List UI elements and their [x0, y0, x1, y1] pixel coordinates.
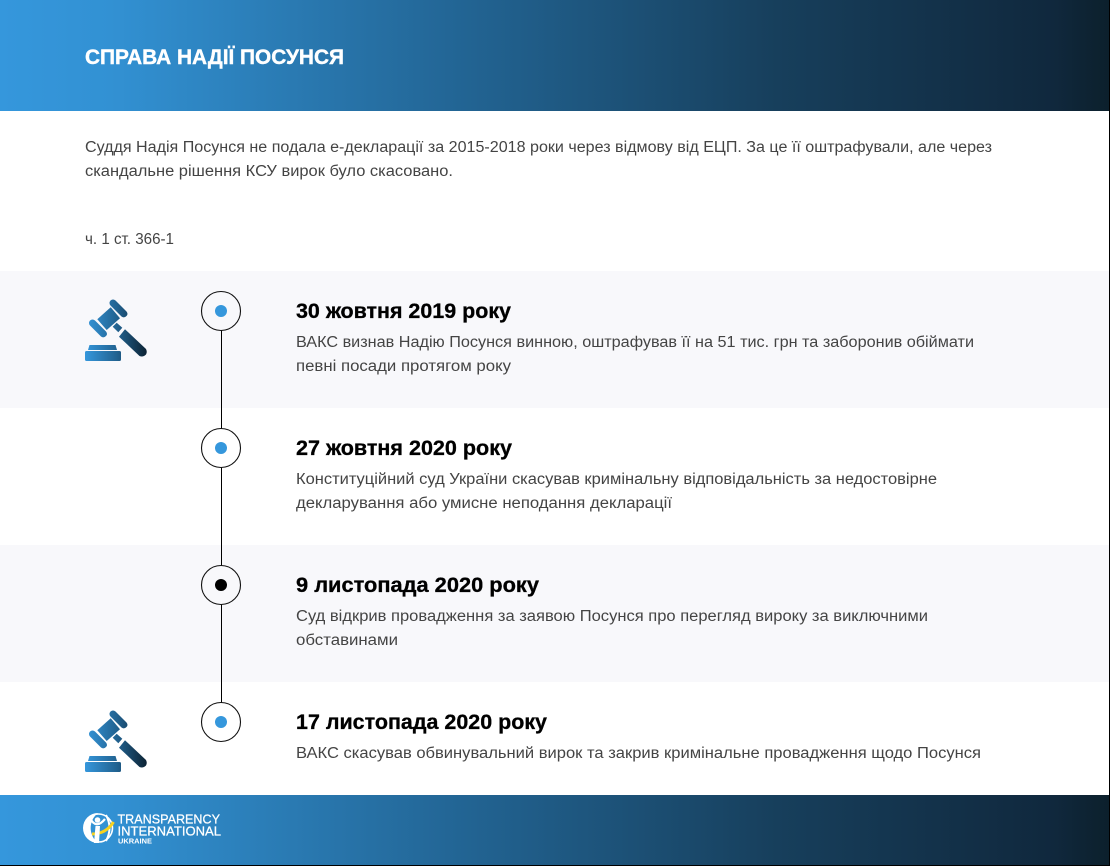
event 2: декларування або умисне неподання декларації	[296, 495, 673, 512]
band 1 background	[0, 271, 1109, 408]
timeline node 4	[202, 702, 240, 742]
event 3: 9 листопада 2020 року	[296, 574, 539, 597]
icon: gavel 1	[85, 300, 147, 361]
timeline node 1	[202, 292, 240, 330]
event 3: Суд відкрив провадження за заявою Посунся про перегляд вироку за виключними	[296, 608, 928, 625]
event 1: певні посади протягом року	[296, 358, 511, 375]
event 2: 27 жовтня 2020 року	[296, 437, 512, 460]
logo wordmark	[118, 812, 221, 846]
event 4: 17 листопада 2020 року	[296, 711, 547, 734]
band 3 background	[0, 545, 1109, 682]
event 1: ВАКС визнав Надію Посунся винною, оштрафував її на 51 тис. грн та заборонив обіймати	[296, 334, 974, 351]
event 4: ВАКС скасував обвинувальний вирок та закрив кримінальне провадження щодо Посунся	[296, 745, 981, 762]
logo wordmark: UKRAINE	[118, 838, 152, 846]
event 1	[296, 300, 974, 375]
logo: Transparency International Ukraine	[83, 812, 221, 846]
header bar	[0, 0, 1109, 111]
footer bar	[0, 795, 1109, 865]
article reference: ч. 1 ст. 366-1	[85, 231, 174, 248]
event 2	[296, 437, 937, 512]
timeline line	[221, 311, 222, 722]
event 1: 30 жовтня 2019 року	[296, 300, 511, 323]
logo wordmark: INTERNATIONAL	[118, 824, 221, 838]
intro text: скандальне рішення КСУ вирок було скасовано.	[85, 163, 453, 180]
timeline node 3	[202, 566, 240, 604]
logo emblem	[83, 813, 114, 843]
intro text	[85, 139, 992, 180]
event 4	[296, 711, 981, 762]
timeline node 2	[202, 428, 240, 468]
icon: gavel 2	[85, 710, 147, 772]
event 2: Конституційний суд України скасував кримінальну відповідальність за недостовірне	[296, 471, 937, 488]
event 3	[296, 574, 928, 649]
title: СПРАВА НАДІЇ ПОСУНСЯ	[85, 46, 344, 69]
intro text: Суддя Надія Посунся не подала е-декларації за 2015-2018 роки через відмову від ЕЦП. За це її оштрафували, але через	[85, 139, 992, 156]
logo wordmark: TRANSPARENCY	[118, 812, 220, 826]
event 3: обставинами	[296, 632, 398, 649]
